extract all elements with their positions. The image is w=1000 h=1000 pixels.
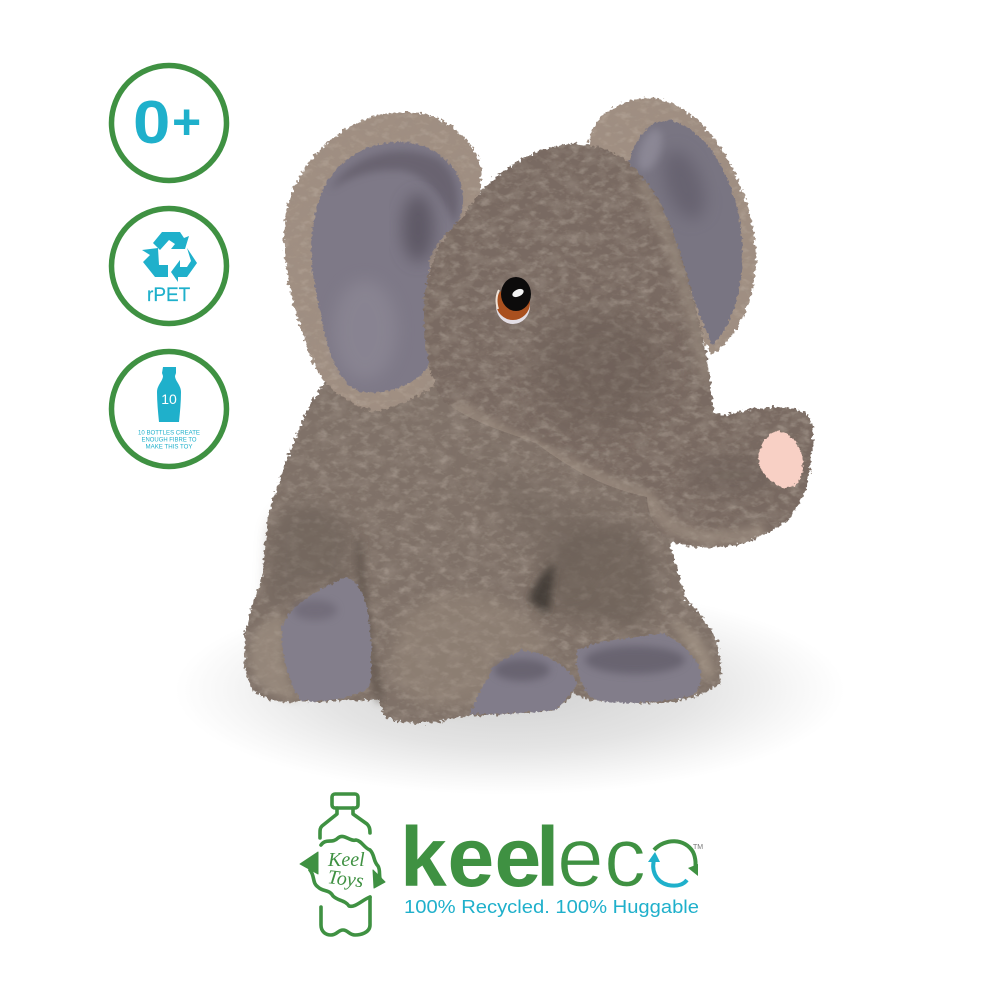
floor shadow <box>175 585 845 795</box>
bottle caption: 10 BOTTLES CREATE <box>138 430 201 436</box>
Keel Toys wordmark: Toys <box>326 866 365 892</box>
body and legs <box>244 340 721 723</box>
plush elephant <box>244 98 813 723</box>
bottle caption: ENOUGH FIBRE TO <box>142 436 196 444</box>
wordmark: ec: ec <box>557 810 646 904</box>
badge: rPET recycling: rPET <box>147 285 191 306</box>
wordmark: o with recycling arrows <box>648 841 698 886</box>
head and trunk <box>424 144 813 547</box>
eye <box>496 277 531 324</box>
icon: bottle <box>157 367 181 422</box>
badge: rPET recycling <box>112 208 226 324</box>
Keel Toys wordmark <box>326 849 365 892</box>
trademark: TM <box>693 844 703 851</box>
badge: 10 bottles <box>112 352 226 466</box>
left ear <box>284 112 482 412</box>
badge: age 0+: 0 <box>133 89 170 156</box>
logo: keeleco <box>300 794 703 935</box>
icon: Keel Toys bottle <box>300 794 385 935</box>
icon: recycling arrows <box>142 232 197 282</box>
bottle caption <box>138 430 201 450</box>
tagline: 100% Recycled. 100% Huggable <box>404 897 699 917</box>
Keel Toys wordmark: Keel <box>327 849 365 871</box>
feet pads <box>282 577 701 714</box>
badge: 10 bottles: 10 <box>161 391 177 407</box>
right ear <box>587 98 756 355</box>
wordmark: keel: keel <box>400 810 559 904</box>
badge: age 0+: + <box>172 94 201 150</box>
badge: age 0+ <box>112 66 226 180</box>
trunk tip: pink nose <box>758 431 803 488</box>
bottle caption: MAKE THIS TOY <box>146 444 193 450</box>
product infographic canvas <box>108 62 815 937</box>
